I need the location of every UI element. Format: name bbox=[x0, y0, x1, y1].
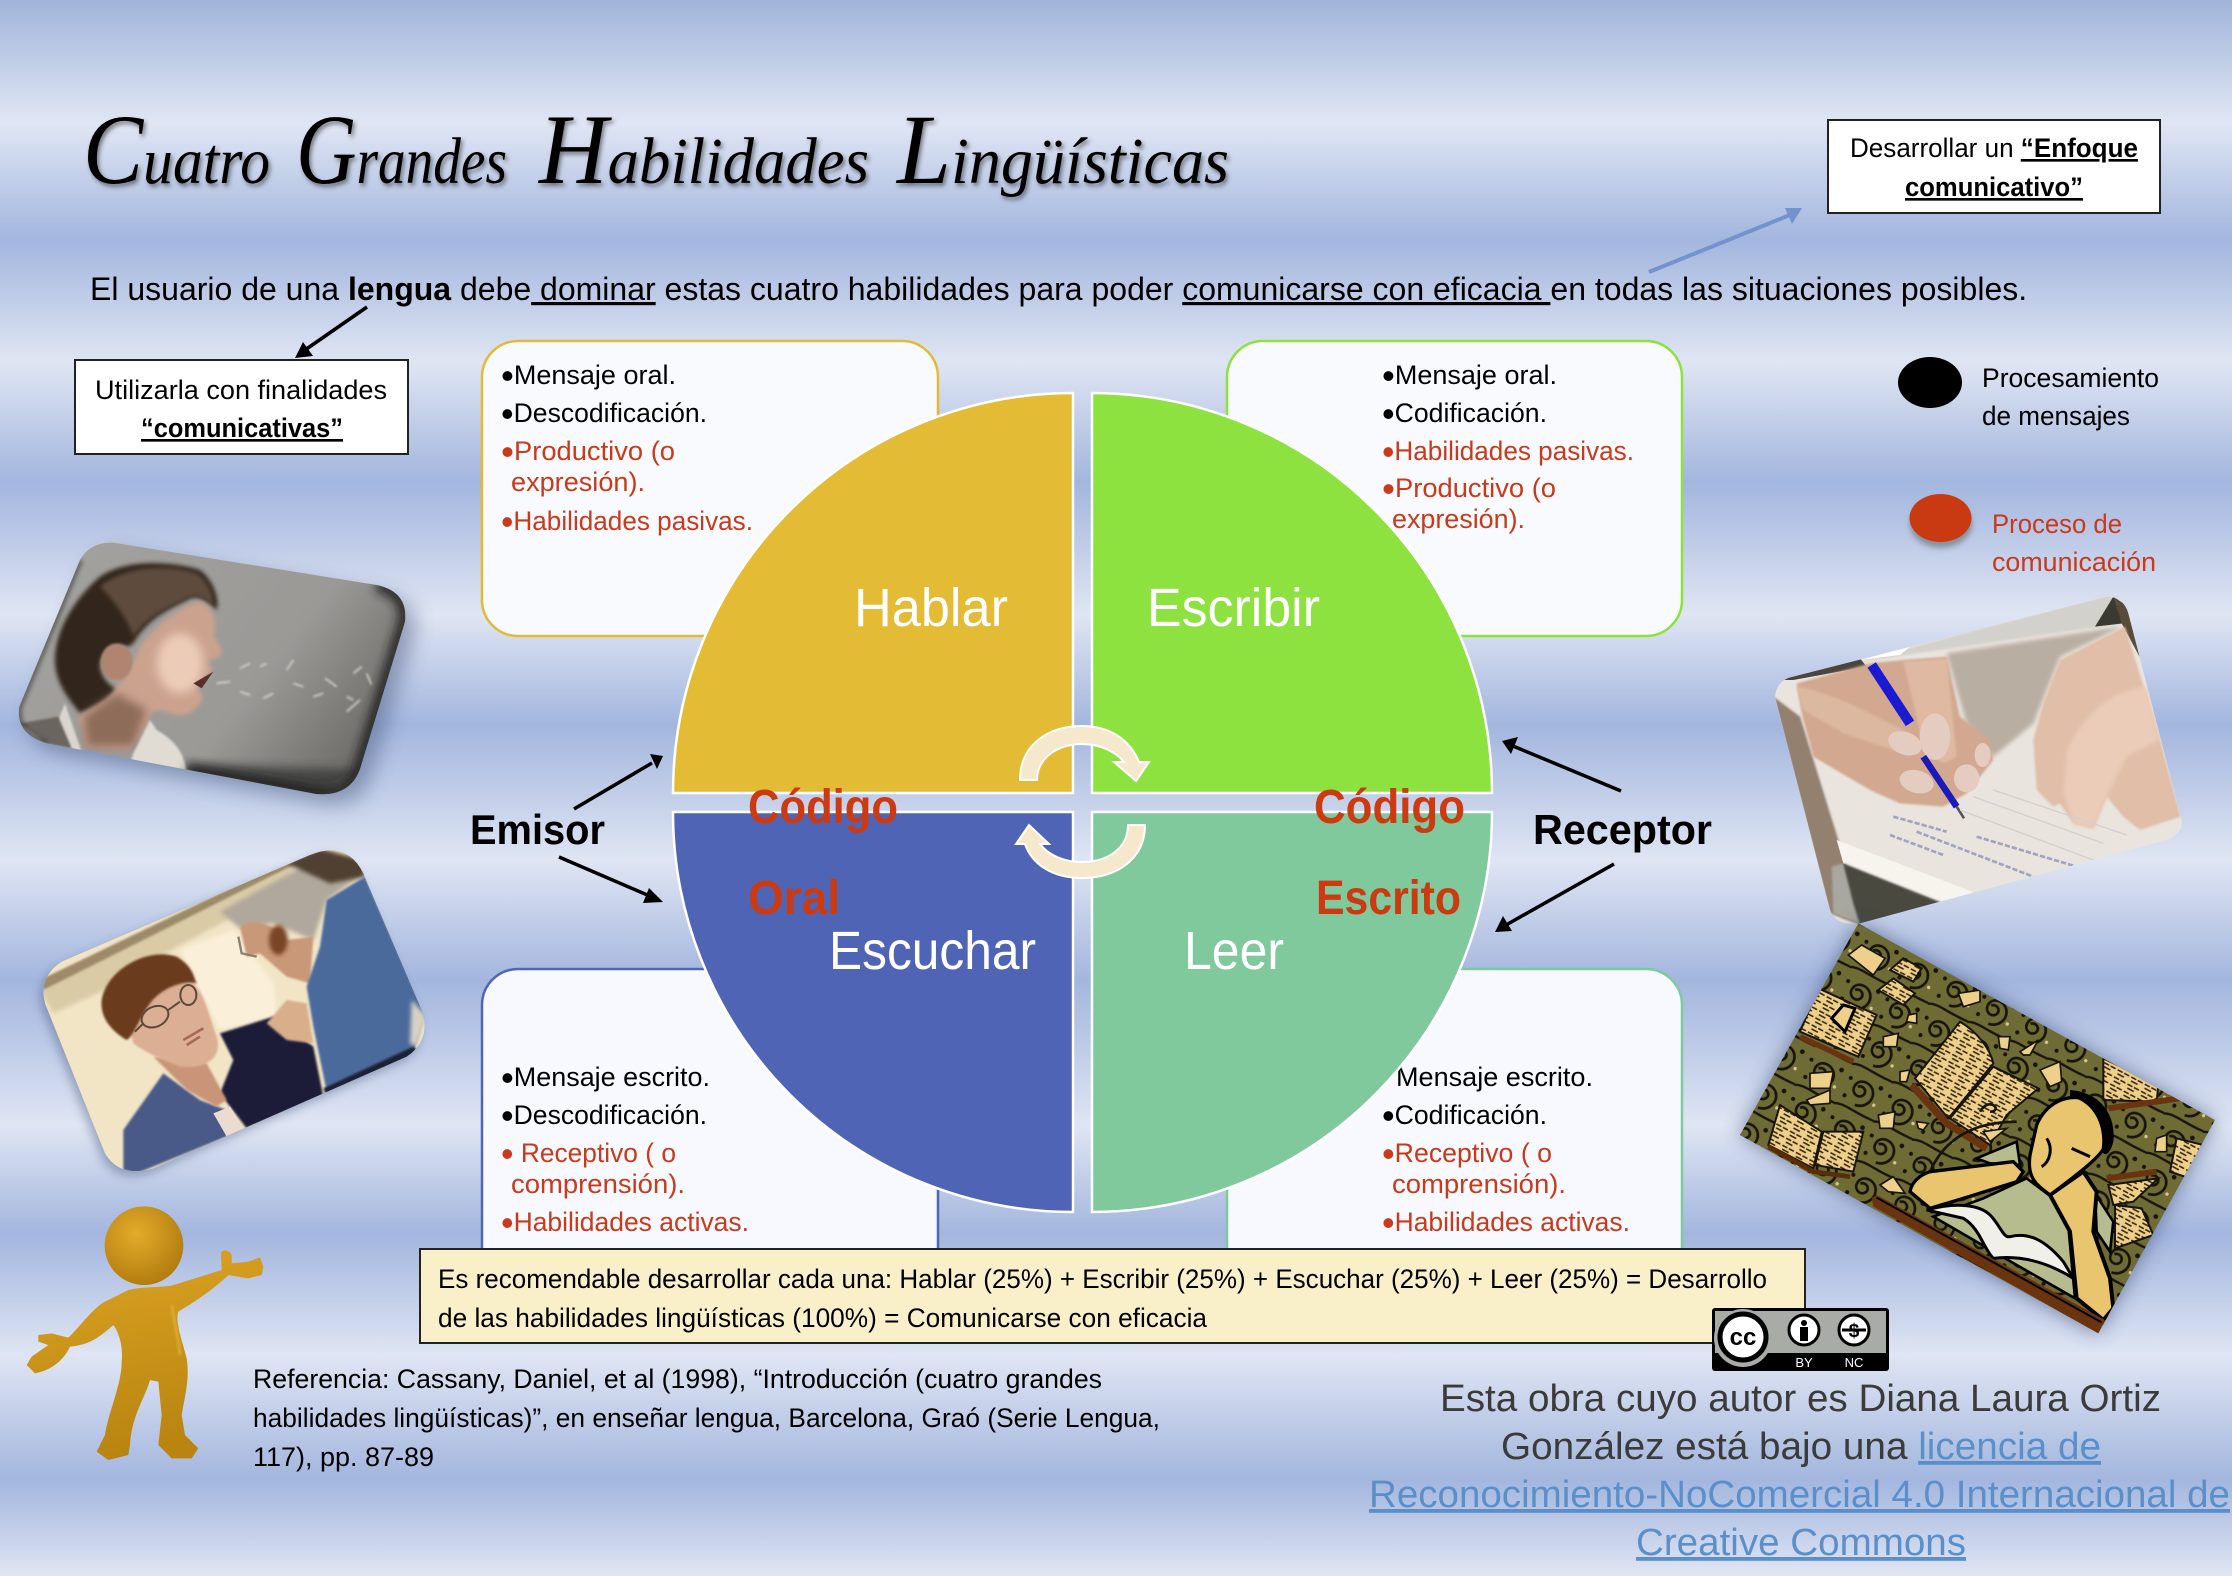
panel: escuchar: • bbox=[501, 1202, 514, 1243]
legend: procesamiento de mensajes: de mensajes bbox=[1982, 401, 2130, 431]
arrow: circular bottom bbox=[1016, 825, 1145, 878]
intro sentence: El usuario de una lengua debe dominar estas cuatro habilidades para poder comunicarse con eficacia en todas las situaciones posibles. bbox=[90, 271, 2027, 307]
title: Lingüísticas bbox=[897, 94, 1237, 205]
label: codigo escrito bbox=[1314, 781, 1465, 925]
text: license attribution: Creative Commons bbox=[1636, 1522, 1966, 1564]
figure: golden 3D person bbox=[27, 1206, 263, 1460]
arrow: receptor to leer bbox=[1495, 864, 1614, 932]
text: reference: 117), pp. 87-89 bbox=[253, 1442, 434, 1472]
text: license attribution: González está bajo una licencia de bbox=[1501, 1426, 2101, 1468]
panel: leer: Codificación. bbox=[1395, 1100, 1547, 1130]
panel: escribir: • bbox=[1382, 431, 1394, 472]
box: finalidades comunicativas: “comunicativas” bbox=[141, 413, 343, 443]
panel: escuchar: Mensaje escrito. bbox=[514, 1062, 710, 1092]
title: Cuatro bbox=[83, 94, 284, 205]
panel: escribir: Productivo (o bbox=[1395, 473, 1556, 503]
panel: escuchar: comprensión). bbox=[511, 1169, 685, 1199]
arrow: emisor to escuchar bbox=[559, 857, 663, 903]
panel: escribir: Codificación. bbox=[1395, 398, 1547, 428]
arrow: to enfoque comunicativo bbox=[1649, 208, 1802, 272]
photo: boy speaking bbox=[0, 530, 430, 810]
panel: hablar: • bbox=[501, 355, 514, 396]
text: license attribution: Reconocimiento-NoComercial 4.0 Internacional de bbox=[1369, 1474, 2230, 1516]
box: enfoque comunicativo: comunicativo” bbox=[1905, 172, 2083, 202]
photo: hands writing bbox=[1775, 596, 2182, 924]
title: Habilidades bbox=[539, 94, 883, 205]
panel: escuchar: • bbox=[501, 1095, 514, 1136]
label: codigo oral: Código bbox=[748, 781, 898, 834]
icon: creative commons badge bbox=[1712, 1308, 1889, 1371]
panel: escuchar: • bbox=[501, 1133, 514, 1174]
label: codigo escrito: Código bbox=[1314, 781, 1465, 834]
panel: hablar: • bbox=[501, 431, 514, 472]
panel: escribir: Mensaje oral. bbox=[1395, 360, 1557, 390]
text: reference bbox=[253, 1364, 1160, 1472]
callout: recommendation: de las habilidades lingüísticas (100%) = Comunicarse con eficacia bbox=[438, 1303, 1207, 1333]
legend: proceso de comunicacion bbox=[1910, 494, 2156, 577]
panel: escuchar: • bbox=[501, 1057, 514, 1098]
panel: leer: Receptivo ( o bbox=[1395, 1138, 1552, 1168]
panel: escribir: • bbox=[1382, 393, 1395, 434]
legend: procesamiento de mensajes: Procesamiento bbox=[1982, 363, 2159, 393]
panel: escuchar bbox=[482, 969, 938, 1289]
panel: escribir: • bbox=[1382, 355, 1395, 396]
icon: creative commons badge: $ bbox=[1849, 1321, 1860, 1342]
label: codigo escrito: Escrito bbox=[1316, 872, 1461, 925]
text: reference: habilidades lingüísticas)”, en enseñar lengua, Barcelona, Graó (Serie Lengua, bbox=[253, 1403, 1160, 1433]
panel: hablar: • bbox=[501, 393, 514, 434]
panel: hablar: Habilidades pasivas. bbox=[513, 506, 753, 536]
panel: leer: Mensaje escrito. bbox=[1396, 1062, 1593, 1092]
quadrant: hablar: Hablar bbox=[854, 578, 1008, 638]
panel: hablar: • bbox=[501, 501, 513, 542]
panel: escuchar: Habilidades activas. bbox=[514, 1207, 749, 1237]
icon: creative commons badge: cc bbox=[1730, 1324, 1756, 1351]
panel: leer: Habilidades activas. bbox=[1395, 1207, 1630, 1237]
panel: leer: • bbox=[1382, 1095, 1395, 1136]
legend: procesamiento de mensajes bbox=[1898, 357, 2159, 431]
quadrant: leer bbox=[1092, 812, 1492, 1212]
legend: proceso de comunicacion: Proceso de bbox=[1992, 509, 2122, 539]
label: emisor: Emisor bbox=[470, 806, 605, 853]
box: enfoque comunicativo: Desarrollar un “Enfoque bbox=[1850, 133, 2138, 163]
icon: creative commons badge: NC bbox=[1845, 1355, 1863, 1370]
legend: proceso de comunicacion: comunicación bbox=[1992, 547, 2156, 577]
panel: hablar: Mensaje oral. bbox=[514, 360, 676, 390]
box: enfoque comunicativo bbox=[1828, 120, 2160, 213]
arrow: circular top bbox=[1020, 726, 1149, 781]
panel: hablar: Descodificación. bbox=[514, 398, 707, 428]
icon: creative commons badge: BY bbox=[1795, 1355, 1813, 1370]
quadrant: escribir bbox=[1092, 393, 1492, 793]
arrow: emisor to hablar bbox=[574, 754, 663, 809]
panel: leer: comprensión). bbox=[1392, 1169, 1566, 1199]
panel: hablar bbox=[482, 341, 938, 636]
quadrant: escribir: Escribir bbox=[1147, 578, 1320, 638]
panel: escribir: Habilidades pasivas. bbox=[1394, 436, 1634, 466]
panel: hablar: Productivo (o bbox=[514, 436, 675, 466]
text: reference: Referencia: Cassany, Daniel, et al (1998), “Introducción (cuatro grandes bbox=[253, 1364, 1102, 1394]
panel: escuchar: Descodificación. bbox=[514, 1100, 707, 1130]
quadrant: escuchar: Escuchar bbox=[829, 921, 1036, 981]
label: codigo oral bbox=[748, 781, 898, 925]
title: Grandes bbox=[296, 94, 536, 205]
photo: two people talking bbox=[20, 840, 440, 1180]
arrow: lengua to comunicativas bbox=[295, 307, 367, 358]
panel: escribir bbox=[1227, 341, 1682, 636]
photo: reader surrounded by books bbox=[1730, 915, 2230, 1345]
text: license attribution: Esta obra cuyo autor es Diana Laura Ortiz bbox=[1440, 1378, 2161, 1420]
panel: leer bbox=[1227, 969, 1682, 1289]
label: receptor: Receptor bbox=[1533, 806, 1712, 853]
panel: escuchar: Receptivo ( o bbox=[514, 1138, 676, 1168]
quadrant: hablar bbox=[673, 393, 1073, 793]
callout: recommendation bbox=[420, 1249, 1805, 1343]
label: codigo oral: Oral bbox=[748, 872, 840, 925]
panel: hablar: expresión). bbox=[511, 467, 645, 497]
panel: escribir: • bbox=[1382, 468, 1395, 509]
panel: escribir: expresión). bbox=[1392, 504, 1525, 534]
box: finalidades comunicativas bbox=[75, 360, 408, 454]
box: finalidades comunicativas: Utilizarla con finalidades bbox=[95, 375, 387, 405]
arrow: receptor to escribir bbox=[1502, 737, 1621, 791]
quadrant: leer: Leer bbox=[1184, 921, 1284, 981]
panel: leer: • bbox=[1382, 1133, 1395, 1174]
panel: leer: • bbox=[1382, 1202, 1395, 1243]
callout: recommendation: Es recomendable desarrollar cada una: Hablar (25%) + Escribir (25%) + Escuchar (25%) + Leer (25%) = Desarrollo bbox=[438, 1264, 1767, 1294]
quadrant: escuchar bbox=[673, 812, 1073, 1212]
text: license attribution bbox=[1369, 1378, 2230, 1564]
